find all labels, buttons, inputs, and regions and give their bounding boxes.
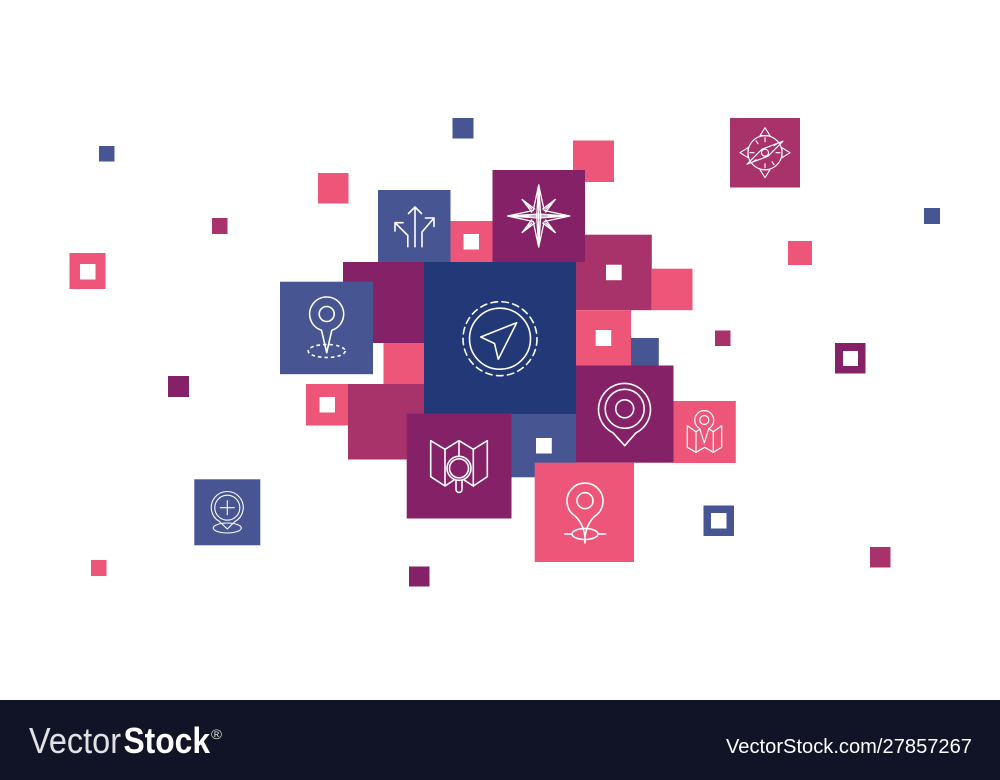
- cluster block: blue with white square: [511, 414, 576, 477]
- scattered square: purple left: [168, 376, 189, 397]
- panel: map with magnifier tile: [407, 414, 512, 518]
- scattered square: pink right: [788, 241, 812, 265]
- panel: pink map tile: [674, 401, 736, 463]
- scattered square: plum centre right: [715, 330, 730, 346]
- cluster block: pink under purple: [384, 343, 424, 384]
- hollow square: purple right: [835, 343, 866, 374]
- panel: pink pin with crosshair tile: [535, 463, 634, 562]
- panel: main navigation tile: [424, 262, 576, 414]
- icon: navigation arrow in circle: [463, 302, 537, 376]
- footer logo: ®: [211, 726, 223, 742]
- cluster block: small blue: [631, 338, 659, 366]
- panel: plus pin tile: [194, 479, 260, 545]
- footer bar: [0, 700, 1000, 780]
- cluster block: pink right: [652, 269, 692, 310]
- icon: three direction arrows: [395, 207, 434, 247]
- scattered square: plum upper left: [212, 218, 228, 234]
- scattered square: blue top: [452, 118, 474, 138]
- scattered square: blue upper left: [99, 146, 114, 162]
- panel: arrows tile: [378, 190, 450, 262]
- hollow square: pink left: [70, 253, 106, 289]
- icon: pin with crosshair: [565, 483, 606, 543]
- cluster block: pink with white square, top: [450, 221, 493, 262]
- footer logo: Vector: [29, 720, 121, 761]
- cluster block: pink with white square, centre right: [576, 310, 631, 366]
- scattered square: pink lower left: [91, 560, 106, 576]
- cluster block: plum with white square: [576, 235, 652, 310]
- icon: location pin on dashed ellipse: [308, 297, 345, 358]
- scattered square: pink top: [573, 140, 614, 182]
- cluster block: pink with white square, lower left: [306, 384, 348, 426]
- footer logo: Stock: [124, 720, 211, 761]
- panel: pin with dashed ellipse tile: [280, 282, 373, 374]
- scattered square: blue right: [924, 208, 940, 224]
- icon: wind rose: [508, 185, 570, 247]
- panel: target pin tile: [576, 366, 674, 463]
- panel: wind rose tile: [492, 170, 585, 262]
- icon: target pin: [598, 383, 651, 446]
- scattered square: plum lower right: [870, 547, 890, 568]
- footer logo: [29, 720, 223, 761]
- scattered square: purple bottom: [409, 566, 430, 586]
- icon: pin with plus: [211, 492, 243, 533]
- scattered square: pink upper left: [318, 173, 348, 204]
- cluster block: plum lower left: [348, 384, 424, 460]
- icon: folded map with magnifier: [431, 441, 487, 492]
- panel: compass tile: [730, 118, 800, 188]
- hollow square: blue lower right: [704, 506, 734, 536]
- icon: map with pin: [687, 411, 722, 452]
- cluster block: purple behind pin: [343, 262, 424, 343]
- icon: compass: [740, 128, 790, 178]
- footer image id: VectorStock.com/27857267: [726, 735, 972, 758]
